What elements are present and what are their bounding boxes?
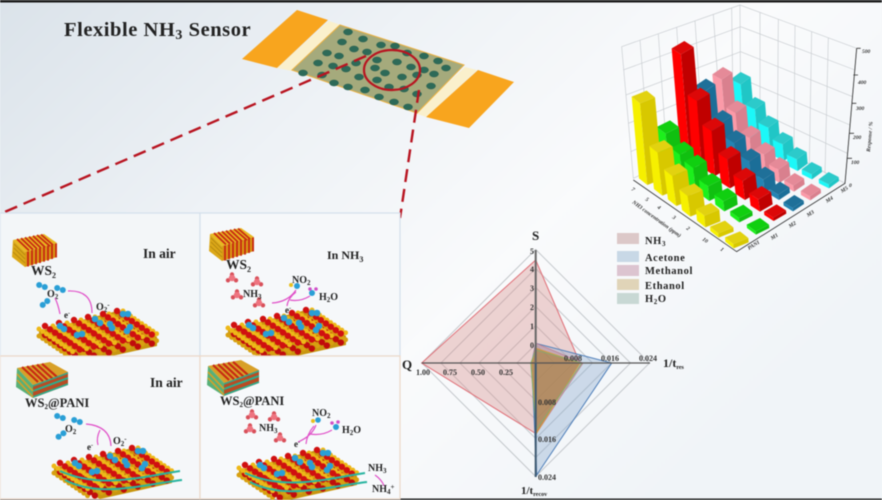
- label: WS2: WS: [226, 257, 247, 272]
- bar chart axis labels: 500: [862, 49, 870, 55]
- label: electron: e: [294, 439, 298, 449]
- radar axis labels: Q: [402, 357, 412, 372]
- label: adsorbed oxygen: -: [124, 435, 127, 443]
- radar axis labels: [402, 228, 685, 498]
- radar axis labels: 3: [530, 284, 534, 293]
- oxygen molecules: [36, 282, 66, 310]
- radar chart: [402, 228, 685, 498]
- radar axis labels: 1.00: [416, 368, 430, 377]
- radar axis labels: 1/t: [663, 356, 676, 370]
- bar chart axis labels: M2: [787, 220, 798, 230]
- radar axis labels: 0.008: [538, 398, 556, 407]
- label: electron: e: [64, 310, 68, 320]
- label: WS2@PANI: @PANI: [243, 394, 284, 408]
- bar chart axis labels: 200: [852, 135, 862, 141]
- oxygen molecules: [54, 413, 83, 442]
- radar axis labels: 2: [530, 303, 534, 312]
- label: WS2@PANI: 2: [239, 401, 243, 409]
- label: adsorbed oxygen: 2: [104, 306, 108, 314]
- reaction products: 2: [327, 412, 331, 420]
- heading: in air: In air: [150, 375, 183, 390]
- ammonia molecules: NH: [243, 289, 258, 300]
- oxygen molecules: O: [65, 424, 73, 435]
- arrow: electron transfer: [55, 291, 92, 314]
- label: WS2: WS: [31, 263, 52, 278]
- ammonia molecules: 3: [258, 293, 262, 301]
- ammonia molecules: [226, 272, 265, 308]
- radar axes: [422, 250, 650, 477]
- legend: Ethanol: [645, 281, 685, 292]
- 3D bar chart: [622, 5, 861, 252]
- label: electron: e: [87, 442, 91, 452]
- icon: WS2@PANI crystal block: [207, 360, 259, 396]
- series: ethanol: [532, 348, 580, 433]
- title: Sensor: [183, 19, 251, 41]
- radar axis labels: 5: [530, 247, 534, 256]
- bar chart axis labels: 10: [701, 237, 709, 245]
- oxygen molecules: 2: [73, 428, 77, 436]
- title: 3: [175, 28, 183, 43]
- bar chart axis labels: 5: [644, 197, 650, 203]
- label: electron: -: [68, 311, 70, 317]
- oxygen molecules: 2: [55, 293, 59, 301]
- reaction products: [289, 275, 338, 304]
- legend: 3: [662, 240, 666, 248]
- radar axis labels: 1: [530, 322, 534, 331]
- radar axis labels: 0.016: [538, 435, 556, 444]
- atomic slab with PANI: [239, 450, 367, 500]
- label: electron: -: [91, 443, 93, 449]
- legend: NH: [645, 236, 662, 247]
- bar chart axis labels: 1: [719, 247, 725, 253]
- red magnification circle and dashed leader lines: [0, 50, 420, 218]
- ammonium conversion: 4: [387, 488, 391, 496]
- ammonium conversion: NH: [372, 484, 387, 495]
- bar chart axis labels: Response / %: [866, 121, 875, 153]
- ammonia molecules: 3: [274, 427, 278, 435]
- reaction products: 2: [350, 429, 354, 437]
- series M5: [731, 72, 839, 188]
- series M3: [695, 79, 804, 211]
- bar chart axis labels: 300: [855, 106, 864, 112]
- reaction products: H: [319, 292, 327, 303]
- label: WS2@PANI: WS: [220, 394, 239, 408]
- radar axis labels: 0.016: [601, 354, 619, 363]
- reaction products: NO: [292, 275, 307, 286]
- ammonium conversion: NH: [368, 463, 383, 474]
- radar axis labels: 0.024: [639, 354, 657, 363]
- radar axis labels: 0.008: [564, 354, 582, 363]
- series: H2O: [531, 350, 582, 430]
- atomic slab: [39, 311, 157, 362]
- series M1: [657, 120, 769, 235]
- reaction products: H: [342, 425, 350, 436]
- label: adsorbed oxygen: O: [113, 436, 121, 447]
- legend: O: [658, 294, 667, 305]
- bar chart axis labels: M4: [824, 195, 835, 205]
- flexible sensor device: [242, 10, 514, 128]
- atomic slab: [228, 310, 346, 361]
- reaction products: [311, 408, 361, 437]
- bar chart axis labels: M1: [769, 232, 780, 242]
- bar chart axis labels: M5: [839, 185, 850, 195]
- bar chart axis labels: 0: [849, 183, 852, 189]
- radar axis labels: 0.024: [538, 473, 556, 482]
- label: electron: -: [289, 306, 291, 312]
- panel: WS2@PANI in NH3: [200, 356, 400, 500]
- label: electron: e: [285, 305, 289, 315]
- bar chart axis labels: 100: [851, 160, 860, 166]
- icon: WS2 crystal block: [209, 228, 254, 261]
- label: electron: -: [298, 440, 300, 446]
- reaction products: O: [353, 425, 361, 436]
- radar axis labels: 0.25: [499, 368, 513, 377]
- radar axis labels: S: [532, 228, 539, 243]
- atomic slab with PANI: [54, 448, 182, 499]
- panel: WS2 in air: [0, 213, 200, 362]
- label: WS2: 2: [52, 271, 56, 280]
- chart grid walls: [622, 5, 857, 183]
- icon: WS2@PANI crystal block: [16, 362, 68, 398]
- bar chart axis labels: 7: [630, 187, 636, 193]
- bar chart axis labels: 2: [684, 225, 691, 232]
- panel: WS2@PANI in air: [0, 356, 200, 499]
- ammonia molecules: [244, 409, 286, 442]
- label: adsorbed oxygen: -: [107, 301, 110, 309]
- radar axis labels: res: [676, 365, 685, 371]
- reaction products: NO: [312, 408, 327, 419]
- radar axis labels: 4: [530, 265, 534, 274]
- radar axis labels: recov: [533, 492, 547, 498]
- axes: [633, 48, 861, 252]
- series: acetone: [532, 343, 612, 475]
- label: WS2: 2: [247, 265, 251, 274]
- legend: Acetone: [645, 253, 685, 264]
- bar chart axis labels: PANI: [747, 239, 762, 252]
- label: WS2@PANI: @PANI: [48, 396, 89, 410]
- legend: 2: [654, 298, 658, 306]
- series: methanol: [532, 343, 583, 433]
- bar chart axis labels: 400: [857, 80, 866, 86]
- ammonium conversion: 3: [383, 467, 387, 475]
- arrow: electron transfer: [86, 424, 111, 446]
- heading: in air: In air: [143, 246, 176, 261]
- legend: [617, 233, 693, 306]
- bar chart axis labels: 4: [655, 204, 662, 211]
- arrow: reaction paths: [298, 425, 332, 444]
- ammonium conversion: [368, 463, 394, 496]
- label: adsorbed oxygen: O: [96, 302, 104, 313]
- label: WS2@PANI: WS: [25, 396, 44, 410]
- bar chart axis labels: 3: [670, 214, 677, 221]
- icon: WS2 crystal block: [12, 234, 57, 267]
- radar grid: [422, 250, 650, 476]
- series PANI: [632, 91, 749, 248]
- label: WS2@PANI: 2: [44, 403, 48, 411]
- arrow: reaction paths: [272, 290, 310, 306]
- oxygen molecules: O: [47, 289, 55, 300]
- reaction products: 2: [327, 296, 331, 304]
- label: adsorbed oxygen: 2: [121, 440, 125, 448]
- bar chart axis labels: M3: [805, 209, 816, 219]
- radar axis labels: 0.50: [471, 368, 485, 377]
- bar chart axis labels: NH3 concentration (ppm): [630, 198, 683, 239]
- heading: in NH3: 3: [359, 255, 363, 264]
- legend: Methanol: [645, 266, 693, 277]
- panel: WS2 in NH3: [200, 213, 400, 361]
- ammonia molecules: NH: [259, 423, 274, 434]
- radar axis labels: 1/t: [521, 485, 533, 497]
- radar axis labels: 0.75: [443, 368, 457, 377]
- radar axis labels: 0: [530, 341, 534, 350]
- legend: H: [645, 294, 654, 305]
- heading: in NH3: In NH: [327, 248, 359, 262]
- title: Flexible NH: [64, 19, 175, 41]
- series: NH3: [422, 260, 580, 434]
- series M4: [712, 67, 821, 200]
- reaction products: O: [330, 292, 338, 303]
- bar chart axis labels: [630, 49, 875, 253]
- ammonium conversion: +: [390, 483, 394, 491]
- series M2: [672, 41, 786, 221]
- reaction products: 2: [307, 279, 311, 287]
